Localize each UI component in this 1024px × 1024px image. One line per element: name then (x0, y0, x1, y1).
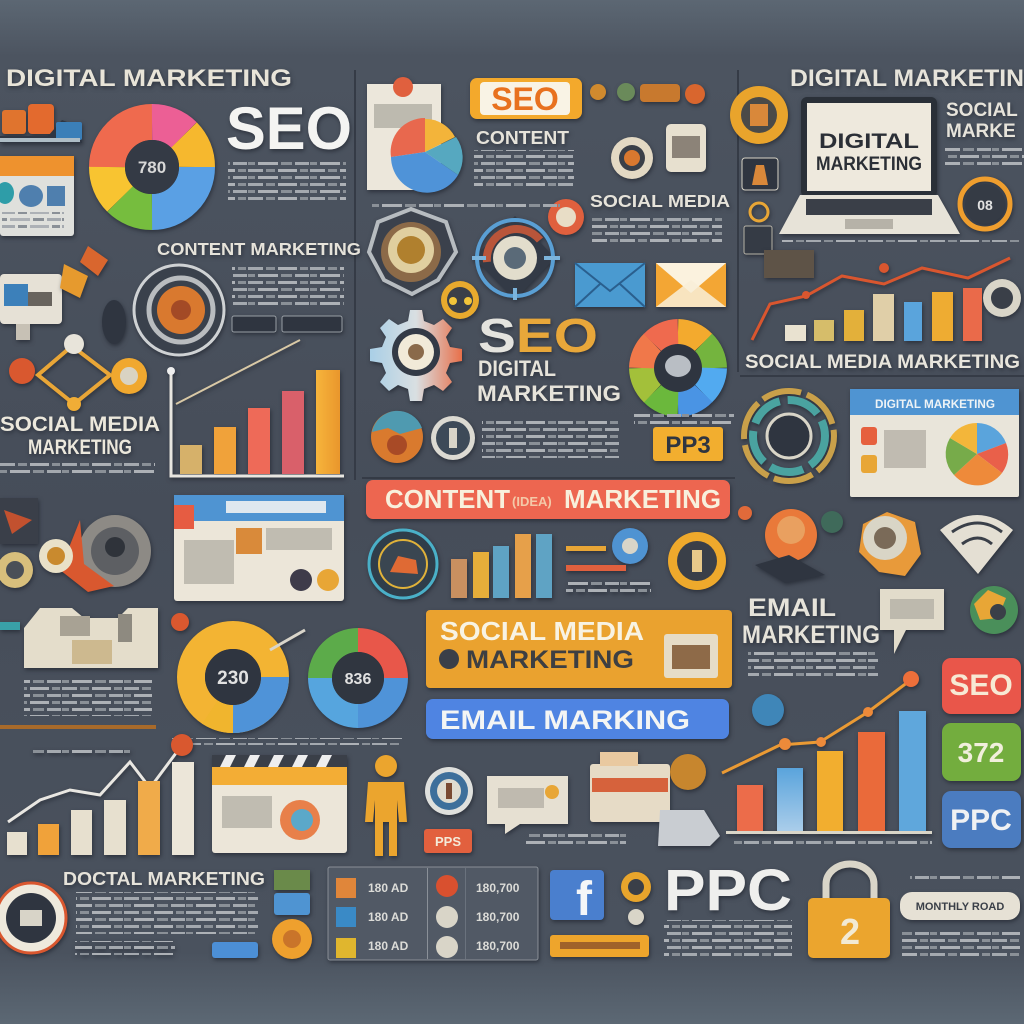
line bar chart right (752, 250, 1021, 341)
heading: digital marketing center (477, 356, 621, 406)
heading: social marketing right: SOCIAL (946, 100, 1018, 121)
heading: social media marketing left: SOCIAL MEDIA (0, 413, 160, 436)
icon: small orange glyphs (60, 246, 126, 344)
icon: padlock (808, 864, 890, 958)
icon: facebook (550, 870, 604, 926)
globe icon (970, 586, 1018, 634)
heading: content marketing left: CONTENT MARKETING (157, 239, 361, 259)
line bar chart bottom left (7, 734, 194, 855)
table panel: 180 AD (368, 881, 409, 895)
icon: badge info (431, 416, 475, 460)
speech bubble (880, 589, 944, 654)
laptop: MARKETING (816, 154, 922, 175)
banner: social media marketing: SOCIAL MEDIA (440, 616, 644, 646)
badges (232, 316, 342, 332)
text block (902, 928, 1020, 958)
badge: seo (470, 78, 582, 119)
chip: white label (900, 892, 1020, 920)
text block (782, 240, 1020, 246)
small yellow icon (744, 203, 772, 254)
icon: coin small (441, 281, 479, 319)
banner: social media marketing: MARKETING (466, 646, 634, 674)
laptop (779, 100, 960, 234)
text block (232, 266, 344, 306)
heading: digital marketing center: MARKETING (477, 381, 621, 406)
document icon with pie (367, 77, 463, 193)
badge: pp3 (653, 427, 723, 461)
banner: content marketing: (IDEA) (512, 494, 552, 509)
heading: email marketing: MARKETING (742, 621, 880, 649)
chip: orange label (550, 935, 649, 957)
icon: orange circle (548, 199, 584, 235)
table panel (328, 867, 538, 960)
donut chart right: 836 (345, 671, 371, 688)
icon: gold coin (668, 532, 726, 590)
heading: digital marketing right: DIGITAL MARKETIN (790, 65, 1024, 92)
bar chart right (722, 671, 932, 834)
table panel: 180,700 (476, 881, 520, 895)
banner: content marketing: MARKETING (564, 484, 721, 514)
text block (592, 214, 722, 246)
small icons top center (590, 83, 706, 179)
table panel: 180 AD (368, 939, 409, 953)
icon: small stacked (272, 870, 312, 959)
dashboard card right: DIGITAL MARKETING (875, 397, 995, 411)
badge: pps: PPS (435, 834, 461, 849)
banner: content marketing (366, 480, 730, 519)
text block (76, 892, 258, 934)
text block (482, 418, 620, 458)
heading: social media marketing left: MARKETING (28, 436, 132, 459)
text block (748, 652, 878, 680)
badge: green (942, 723, 1021, 781)
heading: ppc: PPC (664, 858, 792, 923)
laptop: DIGITAL (819, 130, 919, 153)
building icon (24, 608, 189, 668)
text block (634, 412, 734, 426)
icon: wifi (940, 515, 1013, 574)
badge: green: 372 (958, 737, 1004, 768)
heading: digital marketing left: DIGITAL MARKETING (6, 65, 292, 92)
text block (228, 162, 346, 204)
donut chart center right (642, 332, 714, 404)
text top right (910, 872, 1020, 879)
text block (945, 146, 1024, 168)
icon: blue envelope (575, 263, 645, 307)
banner: email marketing (426, 699, 729, 739)
layered cards icon (590, 752, 720, 846)
icon: facebook: f (576, 873, 593, 926)
banner: content marketing: CONTENT (385, 484, 510, 514)
card: left top dashboard (0, 156, 74, 236)
sliders (566, 528, 651, 592)
icon: monitor left (0, 274, 62, 340)
heading: digital marketing center: DIGITAL (478, 356, 556, 381)
icon: ring (369, 530, 437, 598)
text block (664, 920, 792, 958)
heading: social media: SOCIAL MEDIA (590, 191, 730, 211)
badge: pps (424, 829, 472, 853)
dashboard card right (850, 389, 1019, 497)
icon: person (365, 755, 407, 856)
video card (212, 755, 347, 853)
badge: ppc right: PPC (950, 804, 1012, 837)
badge: seo right (942, 658, 1021, 714)
text block (0, 462, 155, 476)
speech bubble (487, 776, 568, 834)
icon: orange envelope (656, 263, 726, 307)
ring badge bottom left (0, 883, 66, 953)
icon: gear orange (738, 506, 843, 583)
text block (24, 676, 152, 716)
table panel: 180,700 (476, 939, 520, 953)
badge: pp3: PP3 (665, 432, 711, 459)
chip: white label: MONTHLY ROAD (916, 901, 1004, 913)
heading: social marketing right: MARKE (946, 121, 1016, 142)
text block (526, 834, 626, 848)
web page card (174, 495, 344, 601)
divider orange line (0, 725, 156, 729)
text block (372, 204, 560, 210)
icon: target cross (472, 216, 560, 300)
text labels row (172, 738, 402, 745)
heading: doctal marketing: DOCTAL MARKETING (63, 869, 265, 889)
icon: globe (371, 411, 423, 463)
icon: target rings (134, 265, 224, 355)
icon: swirl badge (859, 512, 921, 576)
badge: ppc right (942, 791, 1021, 848)
machinery icon left (0, 498, 151, 630)
network icon (9, 334, 147, 411)
heading: content: CONTENT (476, 128, 569, 148)
text block (732, 838, 932, 845)
heading: social media marketing left (0, 413, 160, 459)
text block (474, 150, 574, 186)
heading: social marketing right (946, 100, 1018, 142)
banner: social media marketing (426, 610, 732, 688)
icon: hexagon badge (369, 209, 456, 294)
radial dial (744, 391, 834, 481)
icon: coin badge (425, 767, 473, 815)
banner: email marketing: EMAIL MARKING (440, 705, 690, 735)
icon: ring badge right (960, 179, 1010, 229)
donut chart right (320, 640, 396, 716)
icon: gear (370, 310, 462, 401)
donut chart: seo (107, 122, 197, 212)
donut chart: seo: 780 (138, 158, 166, 177)
icon: gold badge top right (730, 86, 788, 144)
small icon (742, 158, 778, 190)
icon: padlock: 2 (840, 911, 860, 952)
table panel: 180,700 (476, 910, 520, 924)
table panel: 180 AD (368, 910, 409, 924)
heading: seo left: SEO (226, 95, 352, 162)
heading: seo center: SEO (478, 310, 598, 363)
heading: email marketing: EMAIL (748, 594, 836, 622)
icon: coin (621, 872, 651, 925)
mini bar chart (451, 534, 552, 598)
donut gauge (191, 630, 305, 719)
icon strip left top (0, 104, 82, 143)
badge: seo right: SEO (949, 669, 1013, 702)
icon: ring badge right: 08 (977, 197, 993, 213)
chips (75, 941, 258, 958)
bar chart left (167, 340, 344, 476)
heading: social media marketing right: SOCIAL MEDIA MARKETING (745, 352, 1020, 373)
donut gauge: 230 (217, 668, 249, 689)
heading: email marketing (742, 594, 880, 649)
badge: seo: SEO (491, 81, 559, 117)
